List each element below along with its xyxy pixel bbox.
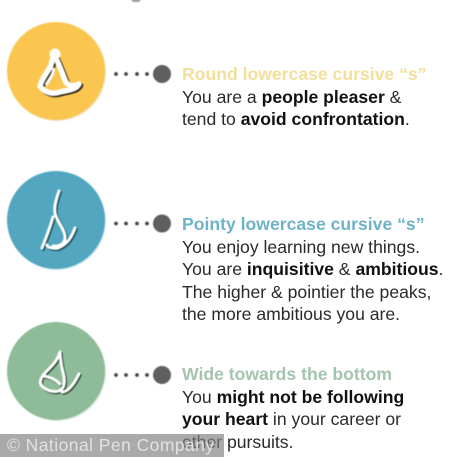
connector: blue row — [114, 214, 171, 232]
text block: round lowercase s: tend to avoid confrontation. — [182, 109, 410, 129]
text block: round lowercase s: You are a people pleaser & — [182, 86, 401, 106]
icon: green circle with wide cursive s — [7, 322, 106, 421]
icon: blue circle with pointy cursive s — [7, 171, 106, 270]
text block: round lowercase s — [182, 64, 426, 129]
watermark: copyright band: © National Pen Company — [7, 435, 215, 455]
connector: green row — [114, 366, 171, 384]
text block: wide towards the bottom: your heart in your career or — [182, 409, 401, 429]
text block: round lowercase s: Round lowercase cursive “s” — [182, 64, 426, 84]
text block: pointy lowercase s: You enjoy learning new things. — [182, 236, 420, 256]
text block: wide towards the bottom: other pursuits. — [182, 432, 293, 452]
icon: yellow circle with round cursive s — [7, 22, 106, 121]
connector: yellow row — [114, 65, 171, 83]
text block: pointy lowercase s: You are inquisitive & ambitious. — [182, 259, 443, 279]
text block: pointy lowercase s: Pointy lowercase cursive “s” — [182, 214, 425, 234]
text block: wide towards the bottom — [182, 364, 404, 452]
top fragment of cropped icon — [130, 0, 142, 2]
text block: pointy lowercase s — [182, 214, 443, 324]
text block: wide towards the bottom: Wide towards the bottom — [182, 364, 392, 384]
text block: wide towards the bottom: You might not be following — [182, 386, 404, 406]
text block: pointy lowercase s: the more ambitious you are. — [182, 304, 400, 324]
text block: pointy lowercase s: The higher & pointier the peaks, — [182, 282, 431, 302]
